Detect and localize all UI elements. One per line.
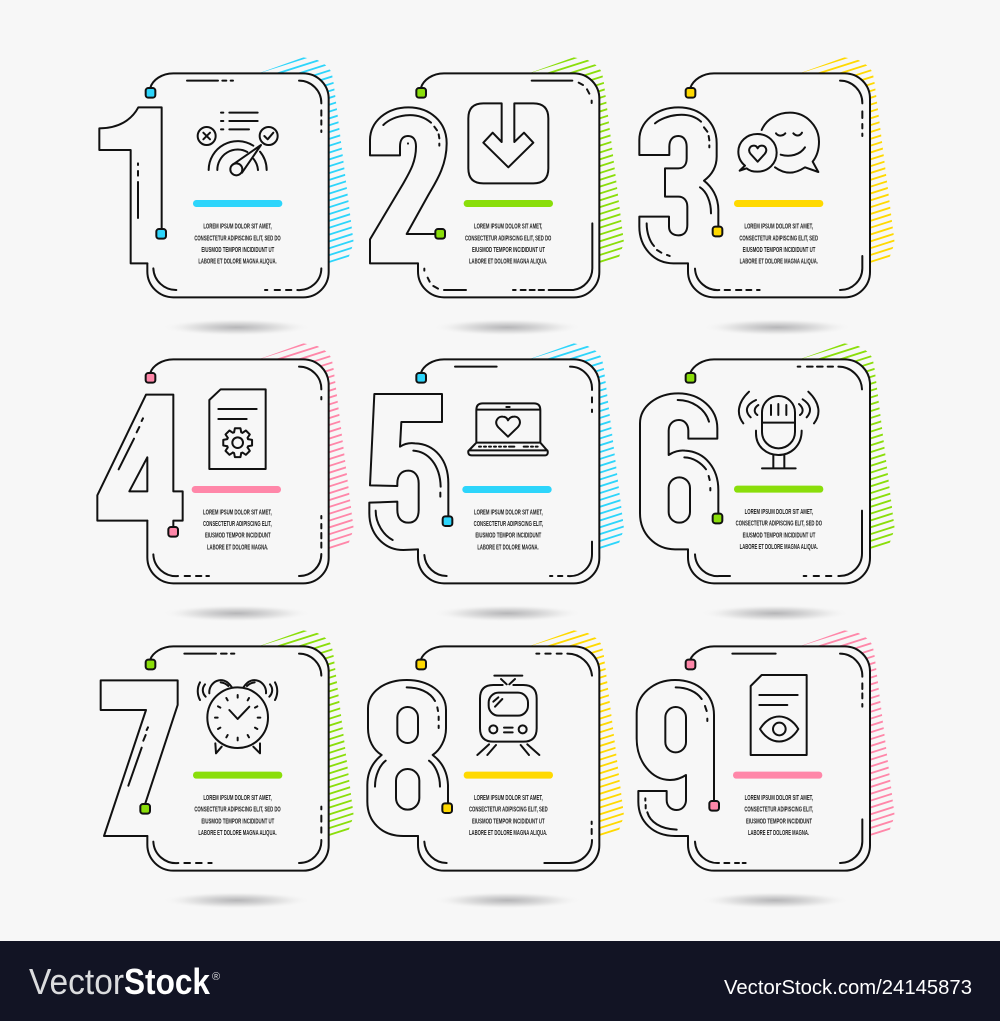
icon: alarm clock bbox=[198, 680, 277, 753]
colour bar bbox=[192, 486, 281, 493]
footer logo: Vector bbox=[29, 961, 124, 1002]
stripes bbox=[529, 327, 627, 570]
text block bbox=[465, 224, 552, 266]
frame bbox=[688, 646, 870, 871]
text block: LABORE ET DOLORE MAGNA ALIQUA. bbox=[198, 259, 277, 266]
colour bar bbox=[733, 772, 822, 779]
frame bbox=[147, 73, 329, 297]
panel 5: laptop bbox=[369, 327, 627, 622]
text block bbox=[736, 509, 822, 551]
text block: EIUSMOD TEMPOR INCIDIDUNT UT bbox=[472, 247, 545, 254]
shadow bbox=[432, 319, 582, 336]
text block: LABORE ET DOLORE MAGNA. bbox=[477, 544, 539, 551]
shadow bbox=[162, 319, 312, 336]
card backing bbox=[688, 73, 870, 297]
panel 3: chat bubbles bbox=[639, 41, 898, 336]
numeral 9 counter bbox=[665, 707, 686, 752]
text block: EIUSMOD TEMPOR INCIDIDUNT bbox=[746, 818, 812, 825]
text block: LOREM IPSUM DOLOR SIT AMET, bbox=[474, 795, 543, 802]
text block: LABORE ET DOLORE MAGNA. bbox=[748, 830, 809, 837]
text block: LABORE ET DOLORE MAGNA ALIQUA. bbox=[740, 259, 818, 266]
colour bar bbox=[464, 772, 553, 779]
colour bar bbox=[193, 200, 282, 207]
card backing bbox=[418, 359, 599, 583]
text block: CONSECTETUR ADIPISCING ELIT, SED DO bbox=[465, 235, 552, 242]
numeral 7 bbox=[101, 680, 178, 836]
numeral 2 bbox=[370, 107, 447, 263]
card backing bbox=[688, 359, 870, 583]
frame accents bbox=[153, 81, 321, 290]
text block: LABORE ET DOLORE MAGNA ALIQUA. bbox=[469, 259, 547, 266]
footer bar bbox=[0, 941, 1000, 1021]
text block: LABORE ET DOLORE MAGNA ALIQUA. bbox=[198, 830, 277, 837]
text block: LOREM IPSUM DOLOR SIT AMET, bbox=[745, 509, 813, 516]
text block: CONSECTETUR ADIPISCING ELIT, SED DO bbox=[194, 807, 281, 814]
stripes bbox=[529, 41, 627, 284]
numeral 8 bbox=[367, 680, 448, 836]
numeral 5 bbox=[369, 394, 448, 550]
text block: LOREM IPSUM DOLOR SIT AMET, bbox=[474, 224, 542, 231]
frame accents bbox=[153, 367, 321, 576]
icon: microphone bbox=[739, 392, 818, 468]
text block bbox=[469, 795, 548, 837]
colour bar bbox=[734, 200, 823, 207]
shadow bbox=[700, 892, 850, 909]
frame accents bbox=[678, 367, 862, 576]
text block bbox=[194, 224, 281, 266]
numeral 6 counter bbox=[669, 477, 690, 523]
connector dot top bbox=[416, 660, 426, 669]
stripes bbox=[529, 614, 627, 857]
numeral 1 bbox=[99, 107, 162, 263]
connector dot top bbox=[146, 660, 155, 669]
numeral 9 bbox=[637, 680, 714, 836]
panel 6: microphone bbox=[640, 327, 898, 622]
frame bbox=[688, 73, 870, 297]
panel 4: settings document bbox=[97, 327, 357, 622]
connector dot bottom bbox=[168, 527, 178, 537]
text block: EIUSMOD TEMPOR INCIDIDUNT UT bbox=[201, 247, 275, 254]
connector dot top bbox=[686, 660, 695, 669]
text block: LABORE ET DOLORE MAGNA ALIQUA. bbox=[469, 830, 547, 837]
connector dot top bbox=[686, 88, 695, 98]
text block bbox=[739, 224, 818, 266]
card backing bbox=[688, 646, 870, 871]
numeral 8 counters bbox=[396, 707, 419, 810]
footer logo: Stock bbox=[124, 961, 211, 1002]
text block: EIUSMOD TEMPOR INCIDIDUNT bbox=[205, 533, 271, 540]
footer logo: ® bbox=[212, 971, 220, 983]
frame accents bbox=[128, 654, 321, 863]
text block: CONSECTETUR ADIPISCING ELIT, bbox=[744, 807, 813, 814]
text block: CONSECTETUR ADIPISCING ELIT, SED DO bbox=[194, 235, 281, 242]
text block: EIUSMOD TEMPOR INCIDIDUNT UT bbox=[201, 818, 275, 825]
frame bbox=[418, 646, 599, 871]
text block: CONSECTETUR ADIPISCING ELIT, bbox=[474, 521, 543, 528]
text block: LOREM IPSUM DOLOR SIT AMET, bbox=[203, 509, 272, 516]
icon: document with gear bbox=[209, 389, 266, 469]
colour bar bbox=[734, 486, 823, 493]
text block: CONSECTETUR ADIPISCING ELIT, SED bbox=[739, 235, 818, 242]
text block: EIUSMOD TEMPOR INCIDIDUNT UT bbox=[743, 247, 816, 254]
text block: LOREM IPSUM DOLOR SIT AMET, bbox=[744, 224, 813, 231]
frame accents bbox=[376, 367, 592, 576]
frame bbox=[147, 646, 329, 871]
frame accents bbox=[375, 654, 592, 863]
text block: CONSECTETUR ADIPISCING ELIT, SED bbox=[469, 807, 548, 814]
text block: LOREM IPSUM DOLOR SIT AMET, bbox=[474, 509, 543, 516]
icon: train bbox=[477, 676, 539, 755]
connector dot top bbox=[146, 373, 155, 383]
text block: CONSECTETUR ADIPISCING ELIT, bbox=[203, 521, 272, 528]
text block: CONSECTETUR ADIPISCING ELIT, SED DO bbox=[736, 521, 822, 528]
panel 8: train bbox=[367, 614, 627, 909]
text block: EIUSMOD TEMPOR INCIDIDUNT bbox=[475, 533, 542, 540]
icon: download arrow bbox=[468, 103, 548, 183]
text block bbox=[474, 509, 543, 551]
text block: LABORE ET DOLORE MAGNA ALIQUA. bbox=[740, 544, 818, 551]
frame bbox=[688, 359, 870, 583]
icon: laptop with heart bbox=[468, 403, 548, 455]
connector dot top bbox=[416, 88, 426, 98]
text block: LOREM IPSUM DOLOR SIT AMET, bbox=[203, 224, 272, 231]
connector dot bottom bbox=[443, 516, 452, 526]
footer image id: VectorStock.com/24145873 bbox=[724, 977, 972, 999]
icon: speedometer bbox=[198, 113, 278, 175]
connector dot top bbox=[686, 373, 695, 383]
shadow bbox=[702, 319, 852, 336]
text block: LOREM IPSUM DOLOR SIT AMET, bbox=[203, 795, 272, 802]
text block bbox=[203, 509, 272, 551]
connector dot top bbox=[416, 373, 426, 383]
stripes bbox=[799, 614, 898, 857]
connector dot bottom bbox=[140, 804, 150, 814]
stripes bbox=[258, 327, 357, 570]
card backing bbox=[418, 646, 599, 871]
shadow bbox=[432, 605, 582, 622]
text block: EIUSMOD TEMPOR INCIDIDUNT UT bbox=[743, 532, 816, 539]
frame accents bbox=[383, 81, 592, 290]
stripes bbox=[799, 41, 898, 284]
text block bbox=[744, 795, 813, 837]
panel 1: speedometer bbox=[99, 41, 357, 336]
colour bar bbox=[464, 200, 553, 207]
connector dot top bbox=[146, 88, 155, 98]
shadow bbox=[162, 892, 312, 909]
text block: LABORE ET DOLORE MAGNA. bbox=[207, 544, 268, 551]
panel 7: alarm clock bbox=[101, 614, 357, 909]
shadow bbox=[700, 605, 850, 622]
connector dot bottom bbox=[435, 229, 445, 239]
numeral 6 bbox=[640, 393, 718, 549]
shadow bbox=[162, 605, 312, 622]
frame accents bbox=[647, 81, 862, 290]
connector dot bottom bbox=[713, 514, 722, 523]
colour bar bbox=[462, 486, 552, 493]
card backing bbox=[147, 73, 329, 297]
stripes bbox=[258, 614, 357, 857]
connector dot bottom bbox=[713, 227, 722, 236]
frame bbox=[147, 359, 329, 583]
footer logo bbox=[29, 961, 220, 1002]
card backing bbox=[147, 359, 329, 583]
frame accents bbox=[645, 654, 862, 863]
stripes bbox=[799, 327, 898, 570]
icon: chat bubbles bbox=[738, 113, 819, 173]
text block: EIUSMOD TEMPOR INCIDIDUNT UT bbox=[472, 818, 545, 825]
numeral 4 bbox=[97, 395, 183, 527]
stripes bbox=[258, 41, 357, 284]
panel 9: view document bbox=[637, 614, 898, 909]
connector dot bottom bbox=[442, 803, 452, 813]
numeral 3 bbox=[639, 107, 718, 263]
panel 2: download bbox=[370, 41, 627, 336]
card backing bbox=[418, 73, 599, 297]
connector dot bottom bbox=[156, 229, 166, 239]
connector dot bottom bbox=[709, 801, 719, 811]
frame bbox=[418, 73, 599, 297]
text block: LOREM IPSUM DOLOR SIT AMET, bbox=[745, 795, 813, 802]
colour bar bbox=[193, 772, 282, 779]
card backing bbox=[147, 646, 329, 871]
text block bbox=[194, 795, 281, 837]
icon: document with eye bbox=[751, 675, 807, 755]
shadow bbox=[432, 892, 582, 909]
frame bbox=[418, 359, 599, 583]
